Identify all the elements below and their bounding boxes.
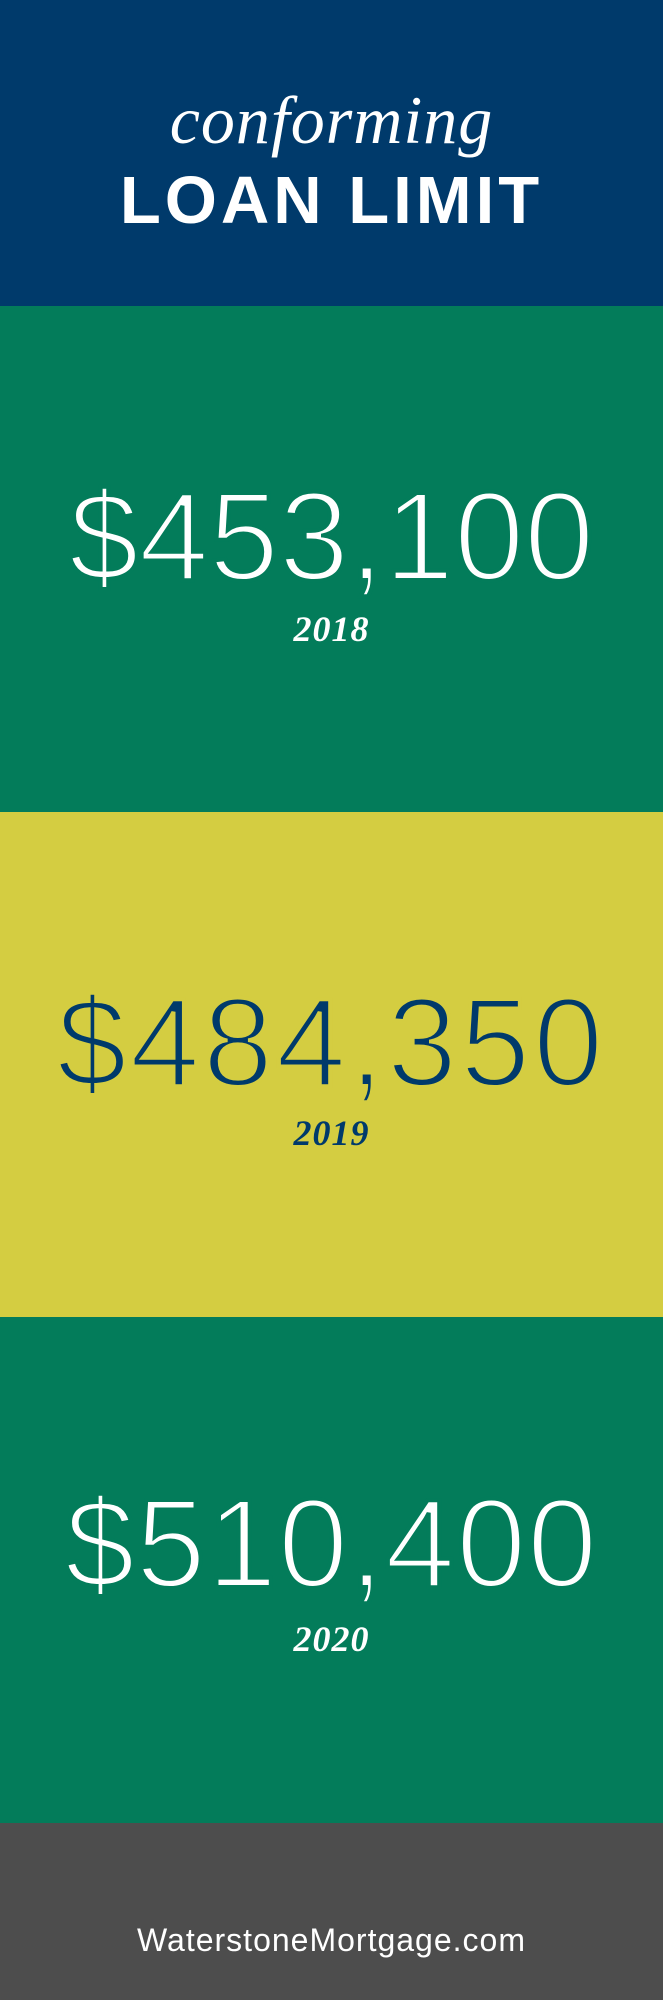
year label 2019: 2019: [294, 1113, 370, 1153]
value 2019: $484,350: [57, 972, 606, 1113]
header panel: [0, 0, 663, 306]
year label 2020: 2020: [294, 1619, 370, 1659]
title: LOAN LIMIT: LOAN LIMIT: [120, 163, 543, 238]
value 2018: $453,100: [69, 466, 594, 607]
subtitle: conforming: conforming: [170, 82, 493, 158]
footer website text: WaterstoneMortgage.com: [137, 1922, 526, 1958]
panel: 2020: [0, 1317, 663, 1823]
value 2020: $510,400: [65, 1473, 598, 1614]
panel: 2018: [0, 306, 663, 812]
footer panel: [0, 1823, 663, 2000]
panel: 2019: [0, 812, 663, 1317]
year label 2018: 2018: [294, 609, 370, 649]
